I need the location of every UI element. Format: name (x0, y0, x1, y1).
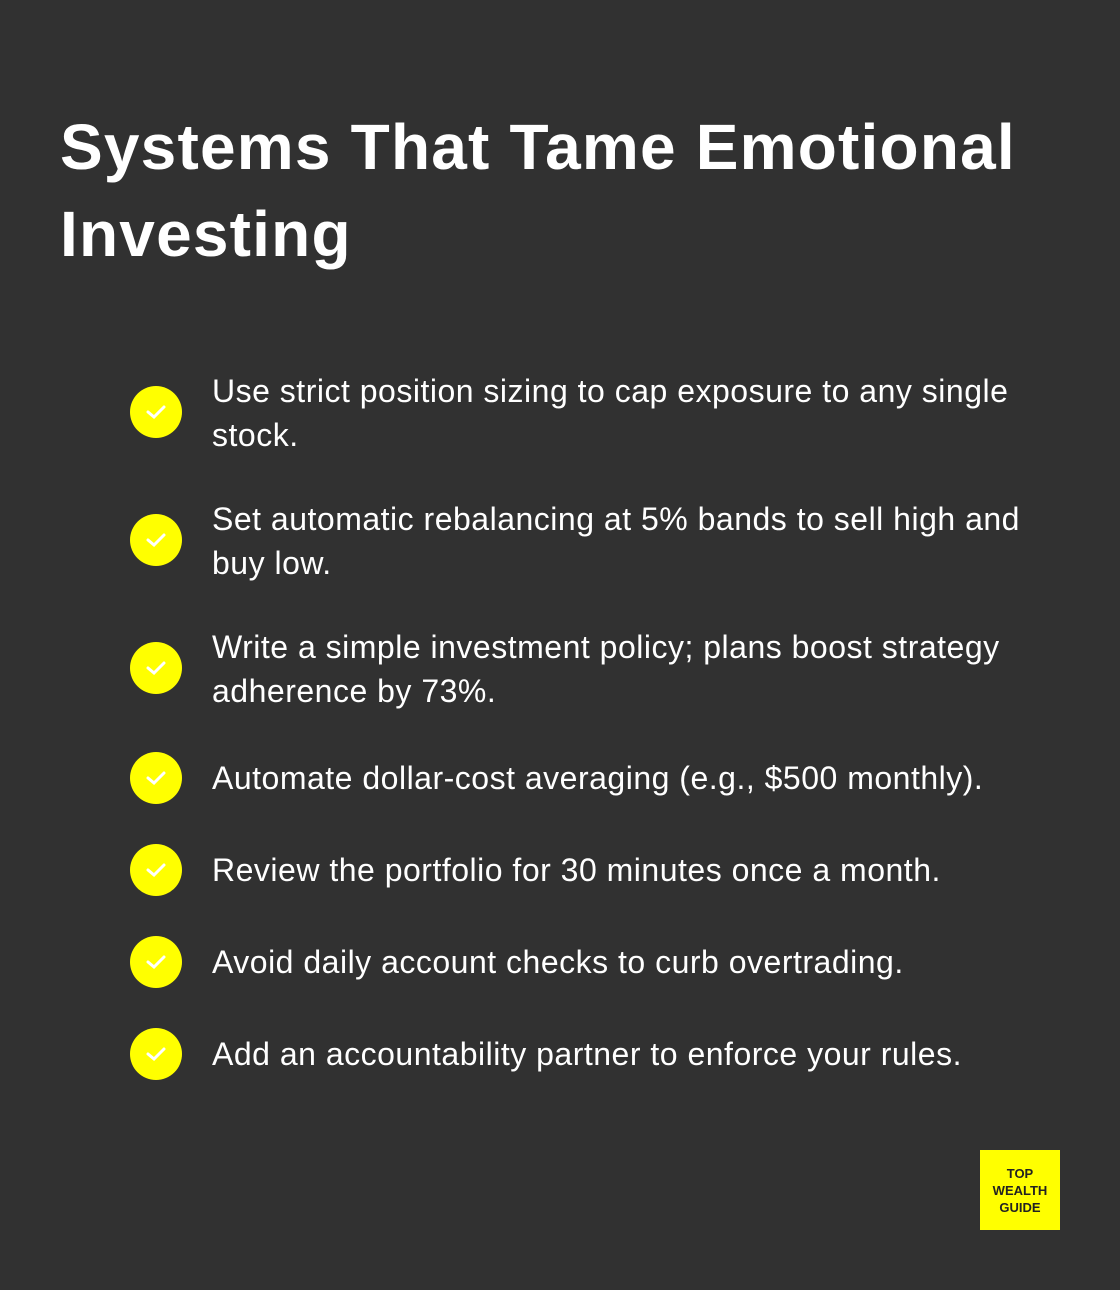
title: Investing (60, 198, 352, 270)
item 1: stock. (212, 417, 299, 453)
item 6: Avoid daily account checks to curb overtrading. (212, 944, 904, 980)
item 2 (130, 501, 1020, 581)
item 5: Review the portfolio for 30 minutes once a month. (212, 852, 941, 888)
item 7 (130, 1028, 962, 1080)
logo: GUIDE (999, 1200, 1041, 1214)
item 5 (130, 844, 941, 896)
title (60, 111, 1016, 270)
title: Systems That Tame Emotional (60, 111, 1016, 183)
item 3: adherence by 73%. (212, 673, 496, 709)
item 4 (130, 752, 983, 804)
item 1: Use strict position sizing to cap exposure to any single (212, 373, 1008, 409)
logo (980, 1150, 1060, 1230)
item 4: Automate dollar-cost averaging (e.g., $500 monthly). (212, 760, 983, 796)
logo: WEALTH (993, 1182, 1047, 1198)
item 3 (130, 629, 1000, 709)
item 2: Set automatic rebalancing at 5% bands to sell high and (212, 501, 1020, 537)
item 1 (130, 373, 1008, 453)
item 2: buy low. (212, 545, 332, 581)
item 7: Add an accountability partner to enforce your rules. (212, 1036, 962, 1072)
item 3: Write a simple investment policy; plans boost strategy (212, 629, 1000, 665)
item 6 (130, 936, 904, 988)
logo: TOP (1007, 1166, 1033, 1180)
